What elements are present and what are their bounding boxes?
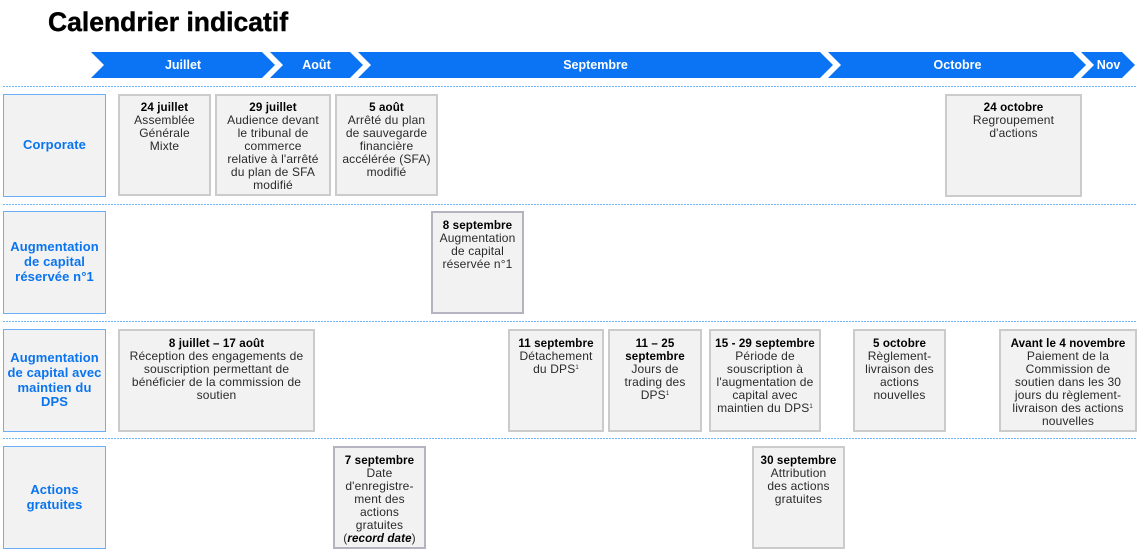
row label: Actions gratuites: gratuites <box>27 496 82 512</box>
event: 29 juillet: du plan de SFA <box>231 165 315 179</box>
event: Avant le 4 novembre: soutien dans les 30 <box>1015 374 1121 388</box>
event: 11 septembre: Détachement <box>519 348 593 362</box>
month arrow: Octobre <box>828 52 1086 78</box>
event: 7 septembre: 7 septembre <box>345 454 414 466</box>
event: 29 juillet: commerce <box>244 139 302 153</box>
event: 8 septembre: réservée n°1 <box>443 256 512 270</box>
event: 29 juillet: relative à l'arrêté <box>227 152 319 166</box>
row label: Augmentation de capital réservée n°1 <box>3 211 106 314</box>
event: 8 juillet – 17 août: 8 juillet – 17 août <box>169 336 264 350</box>
row label: Augmentation de capital réservée n°1: réservée n°1 <box>15 269 94 284</box>
month arrow: Juillet <box>91 52 275 78</box>
event: 24 juillet: Assemblée <box>134 113 195 127</box>
event: 8 septembre: de capital <box>451 244 504 258</box>
row label: Augmentation de capital réservée n°1: de capital <box>24 254 85 269</box>
row label: Augmentation de capital avec maintien du DPS: maintien du <box>17 380 92 394</box>
event: 5 août <box>335 94 438 196</box>
event: 15 - 29 septembre: l'augmentation de <box>717 374 813 388</box>
event: 15 - 29 septembre <box>709 329 821 432</box>
event: 5 août: 5 août <box>369 101 404 114</box>
event: 30 septembre: gratuites <box>775 492 822 506</box>
event: 11 – 25 septembre: Jours de <box>631 362 679 376</box>
event: 24 octobre: 24 octobre <box>984 101 1043 114</box>
event: Avant le 4 novembre <box>999 329 1137 432</box>
event: 24 octobre: d'actions <box>989 126 1038 140</box>
event: 7 septembre: d'enregistre- <box>345 478 414 492</box>
row label: Corporate: Corporate <box>23 137 86 152</box>
row label: Augmentation de capital avec maintien du DPS: DPS <box>41 394 68 409</box>
event: 5 août: de sauvegarde <box>346 126 427 140</box>
event: 15 - 29 septembre: 15 - 29 septembre <box>715 336 815 350</box>
event: 29 juillet: le tribunal de <box>238 126 308 140</box>
event: 8 juillet – 17 août: Réception des engagements de <box>130 348 303 362</box>
event: 24 octobre <box>945 94 1082 197</box>
event: Avant le 4 novembre: Commission de <box>1026 362 1110 376</box>
event: 5 octobre: Règlement- <box>868 348 931 362</box>
event: 30 septembre: 30 septembre <box>761 454 836 466</box>
event: 11 septembre: 11 septembre <box>518 336 594 350</box>
event: 7 septembre: (record date) <box>343 530 416 544</box>
event: 7 septembre: ment des <box>354 492 405 506</box>
row label: Corporate <box>3 94 106 197</box>
event: 11 – 25 septembre: trading des <box>624 374 686 388</box>
event: 29 juillet: 29 juillet <box>249 101 297 114</box>
month arrow: Nov: Nov <box>1097 58 1120 72</box>
row label: Augmentation de capital avec maintien du DPS <box>3 329 106 432</box>
event: 15 - 29 septembre: souscription à <box>727 362 803 376</box>
event: 7 septembre: gratuites <box>356 518 403 532</box>
event: 7 septembre: actions <box>360 504 399 518</box>
event: 8 septembre: 8 septembre <box>443 218 512 232</box>
event: 24 juillet <box>118 94 211 196</box>
month arrow: Nov <box>1081 52 1135 78</box>
event: Avant le 4 novembre: jours du règlement- <box>1015 388 1121 402</box>
month arrow: Août <box>270 52 363 78</box>
month arrow: Septembre <box>358 52 833 78</box>
event: 5 août: financière <box>360 139 413 153</box>
event: 29 juillet: Audience devant <box>227 113 319 127</box>
event: 24 juillet: Générale <box>139 126 190 140</box>
event: 11 septembre <box>508 329 604 432</box>
event: 24 juillet: Mixte <box>150 139 179 153</box>
event: 11 – 25 septembre: DPS1 <box>641 388 669 402</box>
month arrow: Septembre: Septembre <box>563 58 628 72</box>
event: 30 septembre: des actions <box>767 478 830 492</box>
event: 5 octobre: livraison des <box>865 362 934 376</box>
event: 8 juillet – 17 août <box>118 329 315 432</box>
event: 5 août: Arrêté du plan <box>348 113 425 127</box>
event: 11 – 25 septembre: 11 – 25 <box>636 336 674 350</box>
event: 8 septembre: Augmentation <box>440 230 515 244</box>
row label: Augmentation de capital avec maintien du DPS: Augmentation <box>10 350 99 365</box>
event: 24 octobre: Regroupement <box>973 113 1054 127</box>
event: Avant le 4 novembre: Paiement de la <box>1027 348 1109 362</box>
event: 5 octobre <box>853 329 946 432</box>
event: 8 juillet – 17 août: soutien <box>197 388 236 402</box>
timeline months <box>91 52 1135 78</box>
event: 30 septembre: Attribution <box>771 466 826 480</box>
event: 8 septembre <box>431 211 524 314</box>
event: 11 – 25 septembre: septembre <box>625 350 685 362</box>
event: 15 - 29 septembre: maintien du DPS1 <box>717 400 813 414</box>
month arrow: Juillet: Juillet <box>165 58 202 72</box>
month arrow: Août: Août <box>302 58 332 72</box>
event: Avant le 4 novembre: Avant le 4 novembre <box>1011 336 1125 350</box>
event: 30 septembre <box>752 446 845 549</box>
event: Avant le 4 novembre: livraison des actions <box>1012 400 1124 414</box>
row label: Actions gratuites: Actions <box>30 482 79 497</box>
row label: Augmentation de capital avec maintien du DPS: de capital avec <box>8 365 102 380</box>
event: 5 octobre: actions <box>880 374 919 388</box>
event: 5 août: modifié <box>367 165 406 179</box>
event: 7 septembre <box>333 446 426 549</box>
month arrow: Octobre: Octobre <box>934 58 982 72</box>
event: 29 juillet <box>215 94 331 196</box>
event: 11 – 25 septembre <box>608 329 702 432</box>
row label: Augmentation de capital réservée n°1: Augmentation <box>10 239 99 254</box>
event: 7 septembre: Date <box>367 466 392 480</box>
row label: Actions gratuites <box>3 446 106 549</box>
event: Avant le 4 novembre: nouvelles <box>1042 414 1094 428</box>
event: 8 juillet – 17 août: souscription permettant de <box>144 362 289 376</box>
event: 5 octobre: nouvelles <box>873 388 926 402</box>
event: 5 août: accélérée (SFA) <box>342 152 431 166</box>
title: Calendrier indicatif <box>48 7 288 37</box>
event: 24 juillet: 24 juillet <box>141 101 188 114</box>
event: 29 juillet: modifié <box>253 178 293 192</box>
event: 8 juillet – 17 août: bénéficier de la commission de <box>132 374 301 388</box>
event: 15 - 29 septembre: capital avec <box>732 388 798 402</box>
event: 5 octobre: 5 octobre <box>873 336 926 350</box>
event: 15 - 29 septembre: Période de <box>735 348 795 362</box>
event: 11 septembre: du DPS1 <box>533 362 579 376</box>
